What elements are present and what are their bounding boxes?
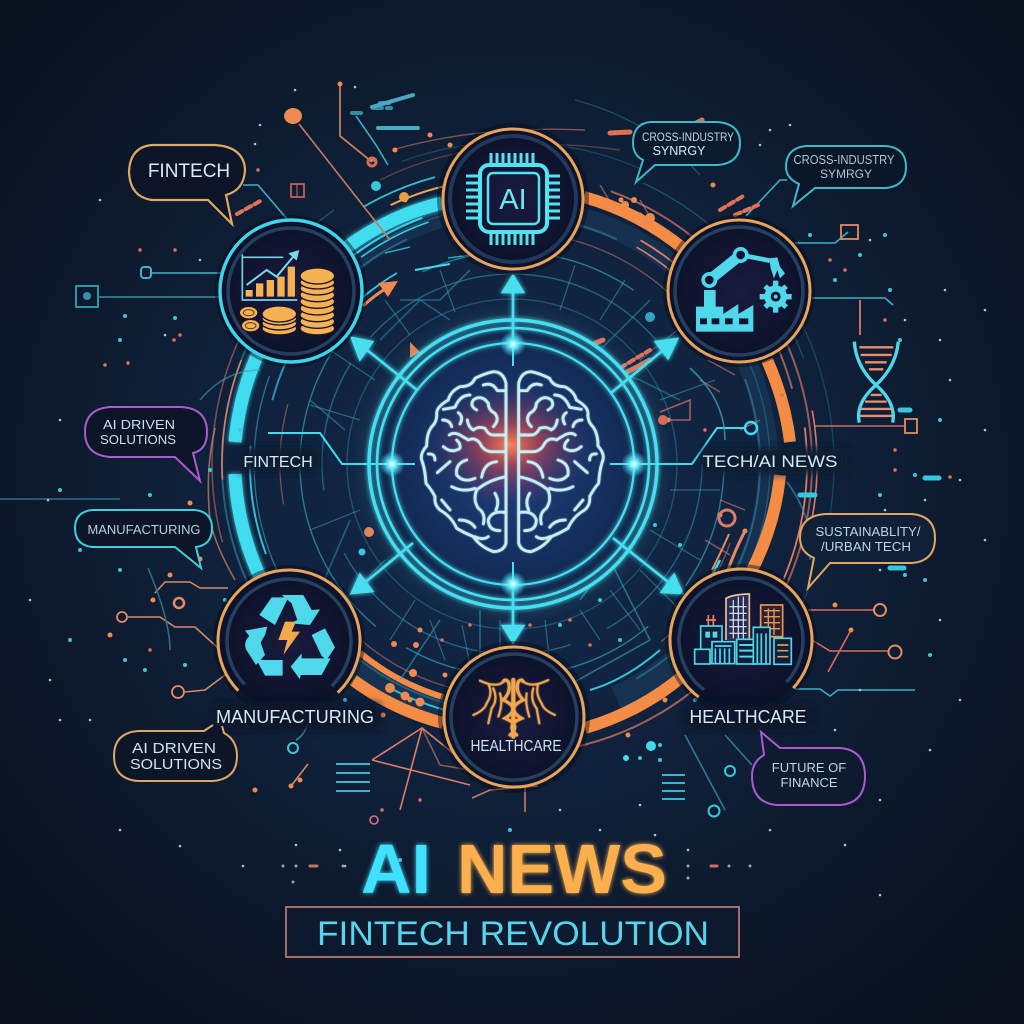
circuit lines and nodes, right	[310, 180, 917, 696]
callout: FINTECH	[129, 145, 245, 224]
callout: AI driven solutions, purple	[85, 407, 207, 481]
icon: chip	[466, 153, 560, 245]
node: smart city	[642, 541, 840, 739]
scattered data dots	[30, 84, 985, 895]
icon: bar chart and coins	[239, 250, 335, 335]
callout: cross-industry synergy 2: SYMRGY	[820, 167, 872, 181]
icon: robot arm, factory and gear	[696, 247, 792, 332]
callout: FINTECH: FINTECH	[148, 161, 230, 182]
subtitle box: FINTECH REVOLUTION: FINTECH REVOLUTION	[317, 915, 709, 953]
central hub rings with brain	[363, 314, 663, 614]
node: healthcare caduceus	[438, 641, 590, 793]
node: robotic manufacturing	[663, 215, 815, 367]
thick teal arcs of the main ring	[235, 203, 442, 577]
callout: AI driven solutions, purple: AI DRIVEN	[103, 417, 175, 432]
circuit lines and nodes, left	[0, 85, 752, 812]
brain hot core	[428, 383, 592, 507]
dense radial band detail	[106, 58, 918, 870]
hub rings	[369, 320, 657, 608]
node label: HEALTHCARE	[470, 738, 562, 755]
callout: cross-industry synergy 1: CROSS-INDUSTRY	[642, 130, 734, 144]
callout: sustainability	[800, 514, 935, 588]
icon: caduceus	[473, 680, 555, 737]
callout: AI driven solutions, tan: SOLUTIONS	[130, 756, 222, 773]
radiating arrows	[352, 276, 682, 642]
node: fintech coins	[215, 215, 367, 367]
title: AI NEWS	[361, 830, 667, 908]
node: AI chip	[437, 123, 589, 275]
callout: AI driven solutions, tan	[114, 725, 237, 781]
chip label: AI	[499, 184, 527, 216]
band nodes between orange arcs	[385, 197, 655, 706]
callout: future of finance	[752, 732, 865, 805]
label: HEALTHCARE: HEALTHCARE	[690, 707, 806, 727]
title: AI NEWS: NEWS	[457, 830, 667, 908]
callout: future of finance: FUTURE OF	[772, 760, 846, 775]
icon: DNA helix	[854, 342, 898, 423]
title: AI NEWS: AI	[361, 830, 431, 908]
callout: cross-industry synergy 1	[633, 122, 740, 182]
callout: cross-industry synergy 1: SYNRGY	[653, 144, 706, 158]
thin concentric tech rings	[99, 51, 925, 877]
callout: AI driven solutions, tan: AI DRIVEN	[132, 740, 216, 757]
accent nodes, rings and mini arrows	[284, 108, 735, 824]
label: FINTECH: FINTECH	[243, 454, 313, 471]
callout: manufacturing	[75, 510, 212, 568]
icon: brain	[421, 372, 603, 552]
title flanking dots	[283, 866, 750, 882]
hub crosshair star nodes	[368, 320, 658, 612]
label: FINTECH	[238, 447, 320, 472]
callout: future of finance: FINANCE	[780, 775, 838, 790]
callout: cross-industry synergy 2: CROSS-INDUSTRY	[794, 153, 895, 167]
label: TECH/AI NEWS: TECH/AI NEWS	[702, 452, 838, 471]
subtitle box: FINTECH REVOLUTION	[286, 907, 739, 957]
callout: sustainability: /URBAN TECH	[821, 539, 911, 554]
callout: manufacturing: MANUFACTURING	[88, 523, 200, 537]
label: MANUFACTURING: MANUFACTURING	[216, 707, 374, 727]
callout: cross-industry synergy 2	[786, 146, 906, 206]
label: TECH/AI NEWS	[702, 448, 847, 474]
node: recycle energy	[189, 541, 389, 741]
icon: city skyline	[695, 594, 791, 664]
callout: sustainability: SUSTAINABLITY/	[816, 524, 921, 539]
callout: AI driven solutions, purple: SOLUTIONS	[100, 432, 176, 447]
icon: recycle arrows and bolt	[245, 595, 335, 679]
thick orange arcs of the main ring	[353, 197, 790, 728]
